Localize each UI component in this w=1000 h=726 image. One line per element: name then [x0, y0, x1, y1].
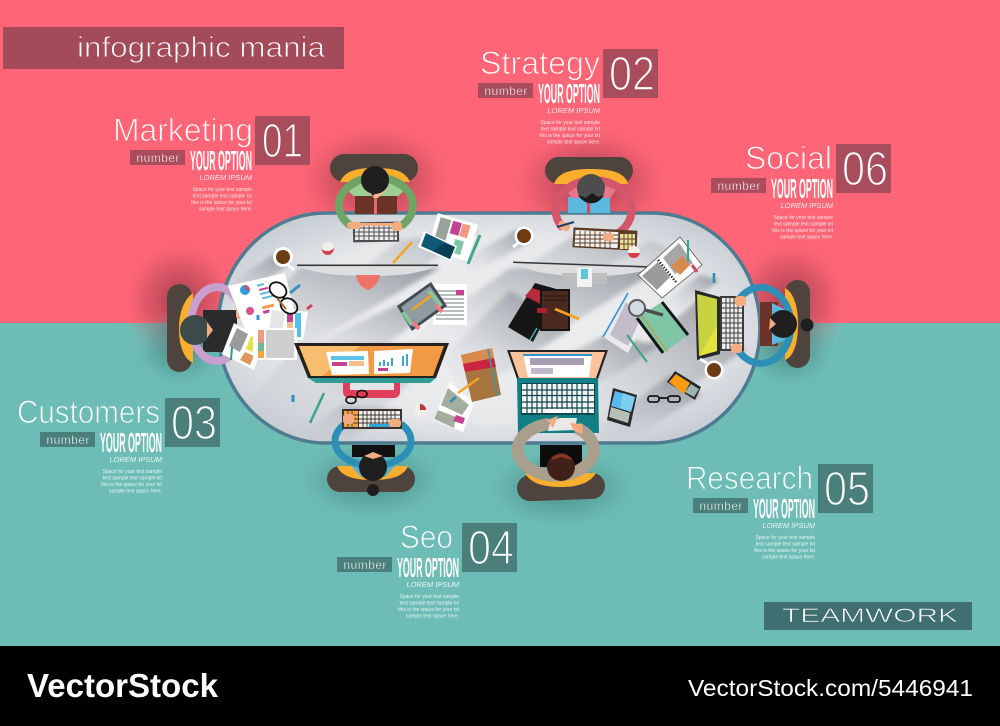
section 01 marketing: 01 [262, 115, 303, 168]
section 03 customers: this is the space for your txt [101, 482, 163, 488]
section 03 customers: LOREM IPSUM [109, 455, 163, 464]
section 06 social: this is the space for your txt [772, 228, 834, 234]
brown notebook and paper [433, 348, 501, 432]
section 05 research: Space for your text sample [756, 535, 815, 541]
black book with brown notepad [508, 283, 579, 342]
section 06 social: number [718, 179, 760, 193]
section 02 strategy: Space for your text sample [541, 120, 600, 126]
number box [255, 116, 310, 165]
section 05 research: sample text space here. [762, 554, 815, 560]
footer bar [0, 646, 1000, 726]
tablet with stylus and paper [397, 282, 467, 331]
computer mouse bottom [414, 404, 426, 416]
teamwork label: TEAMWORK [782, 606, 959, 627]
section 03 customers [17, 394, 220, 494]
computer mouse top left [322, 242, 334, 255]
person 1 green sweater [330, 154, 418, 242]
section 01 marketing: Marketing [113, 112, 253, 148]
section 04 seo: this is the space for your txt [398, 607, 460, 613]
section 04 seo: sample text space here. [406, 614, 459, 620]
glasses under the monitor [346, 390, 367, 404]
teamwork label [764, 602, 972, 630]
person 6 blue sweater, right side [738, 280, 814, 368]
section 05 research: 05 [824, 463, 870, 516]
number box [462, 523, 517, 572]
section 03 customers: sample text space here. [109, 488, 162, 494]
documents on the left of the table [222, 273, 308, 370]
section 05 research [686, 460, 873, 560]
section 01 marketing: number [136, 151, 180, 165]
section 04 seo: number [344, 558, 386, 572]
section 03 customers: text sample text sample txt [103, 476, 163, 482]
section 03 customers: Customers [17, 394, 160, 430]
person 3 purple sweater, left side [167, 284, 246, 372]
background: teal lower band [0, 323, 1000, 646]
section 05 research: number [700, 499, 742, 513]
section 05 research: Research [686, 460, 813, 496]
glasses near the documents [267, 279, 300, 317]
coffee mug top [513, 226, 534, 247]
section 02 strategy: YOUR OPTION [538, 78, 600, 109]
number box [603, 49, 658, 98]
person 5 tan sweater, bottom [517, 416, 605, 502]
section 01 marketing: LOREM IPSUM [199, 173, 253, 182]
section 06 social: Social [745, 140, 832, 176]
section 04 seo: Seo [400, 519, 453, 555]
section 01 marketing: YOUR OPTION [190, 145, 252, 176]
section 03 customers: YOUR OPTION [100, 427, 162, 458]
section 02 strategy: Strategy [480, 45, 600, 81]
section 01 marketing [113, 112, 310, 212]
section 01 marketing: this is the space for your txt [191, 200, 253, 206]
section 03 customers: 03 [171, 397, 217, 450]
pins and pencil at left [231, 285, 312, 360]
paper, green book and magnifier [603, 293, 688, 362]
section 02 strategy: LOREM IPSUM [547, 106, 601, 115]
section 04 seo: LOREM IPSUM [406, 580, 460, 589]
spiral planner [638, 237, 702, 298]
section 04 seo [337, 519, 517, 620]
section 04 seo: text sample text sample txt [400, 600, 460, 606]
section 05 research: text sample text sample txt [756, 542, 816, 548]
section 06 social: sample text space here. [780, 234, 833, 240]
monitor top left, seen from behind [297, 264, 438, 290]
section 06 social: Space for your text sample [774, 215, 833, 221]
section 06 social: text sample text sample txt [774, 222, 834, 228]
section 03 customers: number [46, 433, 90, 447]
section 04 seo: 04 [468, 522, 514, 575]
green pencil and pin [293, 393, 324, 423]
coffee mug right [700, 359, 724, 380]
laptop bottom [507, 350, 608, 433]
monitor top right, seen from behind [513, 262, 657, 287]
computer mouse top right [628, 246, 640, 258]
background: pink upper band [0, 0, 1000, 323]
notebook and teal folder top [418, 213, 480, 264]
person 2 red sweater [545, 157, 637, 251]
chart report [228, 273, 297, 335]
desktop monitor with orange screen [294, 343, 449, 398]
number box [836, 144, 891, 193]
section 05 research: this is the space for your txt [754, 548, 816, 554]
section 02 strategy: text sample text sample txt [541, 126, 601, 132]
section 06 social [711, 140, 891, 240]
section 04 seo: Space for your text sample [400, 594, 459, 600]
blue pin on table [713, 273, 715, 283]
footer brand: VectorStock [27, 667, 219, 704]
section 01 marketing: sample text space here. [199, 206, 252, 212]
section 02 strategy: number [484, 84, 528, 98]
paper rotated bottom left [222, 323, 264, 370]
orange smartphone [667, 371, 701, 400]
section 02 strategy: this is the space for your txt [539, 133, 601, 139]
long diagonal shadows on the table [215, 230, 745, 445]
number box [818, 464, 873, 513]
section 06 social: LOREM IPSUM [780, 201, 834, 210]
pencil yellow [393, 242, 412, 263]
glasses right [648, 396, 680, 402]
footer image id: VectorStock.com/5446941 [688, 675, 973, 701]
section 02 strategy: sample text space here. [547, 140, 600, 146]
section 06 social: 06 [842, 143, 888, 196]
section 05 research: YOUR OPTION [753, 493, 815, 524]
section 01 marketing: text sample text sample txt [193, 194, 253, 200]
table [215, 213, 760, 445]
section 04 seo: YOUR OPTION [397, 552, 459, 583]
number box [165, 398, 220, 447]
glow shadows behind chairs [120, 120, 850, 533]
person 4 blue sweater, bottom [327, 409, 415, 496]
laptop on the right [695, 290, 746, 360]
title banner [3, 27, 344, 69]
section 03 customers: Space for your text sample [103, 469, 162, 475]
title banner: infographic mania [77, 32, 326, 64]
paper landscape [253, 328, 297, 360]
paper with blue column [266, 307, 308, 340]
section 05 research: LOREM IPSUM [762, 521, 816, 530]
section 02 strategy [478, 45, 658, 146]
tablet bottom [607, 388, 637, 427]
coffee mug left [273, 247, 294, 270]
section 06 social: YOUR OPTION [771, 173, 833, 204]
section 01 marketing: Space for your text sample [193, 187, 252, 193]
section 02 strategy: 02 [609, 48, 655, 101]
